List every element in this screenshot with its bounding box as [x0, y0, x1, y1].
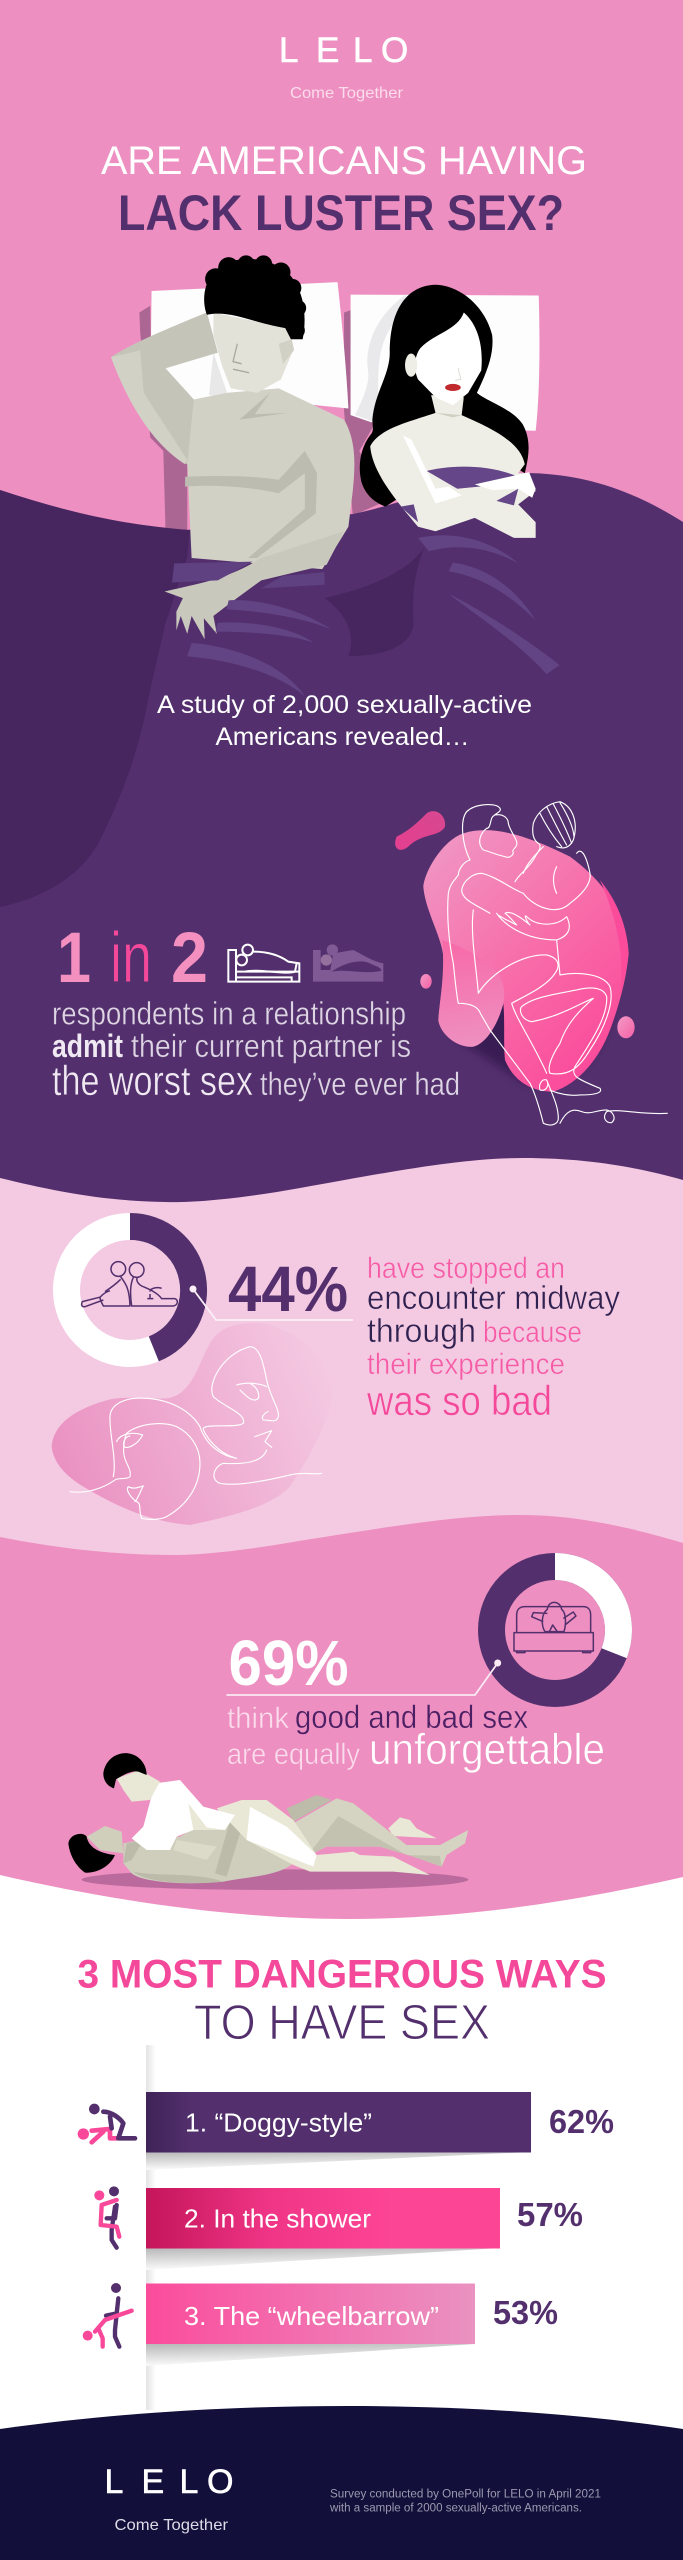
bar: wheelbarrow	[146, 2284, 558, 2366]
illustration: embracing couple	[68, 1753, 468, 1890]
panel: white section	[0, 1875, 683, 2560]
man's hair	[204, 255, 306, 339]
text block: stopped midway: encounter midway	[367, 1279, 620, 1316]
bar: doggy-style: 62%	[549, 2103, 614, 2140]
illustration: headboard and pillows	[139, 282, 539, 531]
icon: position two	[94, 2186, 119, 2248]
bar: in the shower: 2. In the shower	[184, 2204, 371, 2234]
bar: doggy-style	[146, 2092, 614, 2170]
man's body	[111, 312, 354, 569]
text block: stopped midway: have stopped an	[367, 1252, 565, 1285]
panel: purple blanket section	[0, 473, 683, 1202]
stat: 44%: 44%	[228, 1253, 348, 1325]
stat: 1 in 2	[57, 919, 208, 998]
illustration: couple in bed	[111, 255, 560, 696]
icon: bed outline	[228, 945, 299, 982]
icon: back to back couple	[82, 1262, 177, 1307]
logo: LELO header: LELO	[279, 31, 408, 70]
heading: dangerous ways: TO HAVE SEX	[194, 1996, 490, 2050]
decoration: dark blanket shadow	[0, 490, 190, 907]
lower figure	[123, 1803, 293, 1883]
text block: survey source: with a sample of 2000 sexually-active Americans.	[329, 2502, 582, 2514]
icon: position three	[83, 2283, 132, 2347]
upper torso	[132, 1780, 235, 1850]
text block: stopped midway: their experience	[367, 1348, 565, 1381]
stat: 69%: 69%	[228, 1627, 348, 1699]
upper figure legs	[217, 1800, 430, 1875]
text block: respondents statement	[52, 996, 460, 1104]
text block: stopped midway	[366, 1252, 620, 1424]
upper face and hair	[117, 1770, 160, 1802]
text block: study intro	[157, 691, 532, 751]
line art	[448, 802, 667, 1125]
icon: bed with figure	[514, 1602, 593, 1653]
bar: doggy-style: 1. “Doggy-style”	[185, 2108, 372, 2138]
text block: respondents statement: respondents in a relationship	[52, 996, 406, 1032]
text block: stopped midway: was so bad	[366, 1377, 552, 1424]
icon: bed filled	[313, 944, 383, 982]
chart: 44% donut	[66, 1226, 194, 1354]
text block: survey source: Survey conducted by OnePoll for LELO in April 2021	[330, 2488, 601, 2500]
bar: wheelbarrow: 3. The “wheelbarrow”	[184, 2301, 439, 2331]
text block: stopped midway: because	[483, 1316, 582, 1349]
title: LACK LUSTER SEX?	[118, 185, 564, 241]
text block: study intro: Americans revealed…	[216, 723, 470, 751]
logo: LELO footer: LELO	[104, 2463, 233, 2501]
blanket folds	[172, 562, 253, 583]
text block: respondents statement: admit	[52, 1028, 123, 1064]
illustration: line-art faces	[52, 1323, 333, 1525]
text block: unforgettable: are equally	[227, 1738, 360, 1771]
bar: in the shower	[146, 2188, 583, 2270]
illustration: pink blob with line-art couple	[395, 802, 667, 1125]
panel: navy footer	[0, 2406, 683, 2560]
bar: in the shower: 57%	[517, 2196, 583, 2233]
text block: respondents statement: their current partner is	[131, 1028, 411, 1064]
bar: wheelbarrow: 53%	[493, 2294, 558, 2331]
bar chart: dangerous positions	[146, 2092, 614, 2366]
text block: unforgettable	[227, 1699, 605, 1774]
stat: 1 in 2: in	[110, 919, 152, 998]
text block: respondents statement: they’ve ever had	[260, 1066, 460, 1102]
text block: respondents statement: the worst sex	[52, 1057, 253, 1104]
stat: 1 in 2: 1	[57, 919, 91, 998]
title	[101, 139, 587, 241]
stat: 1 in 2: 2	[171, 919, 208, 998]
tagline: footer: Come Together	[114, 2517, 229, 2534]
woman's hair	[360, 285, 529, 507]
text block: stopped midway: through	[367, 1312, 476, 1349]
woman's body	[370, 395, 536, 538]
text block: unforgettable: unforgettable	[369, 1725, 605, 1774]
callout: 44% leader line	[190, 1286, 353, 1320]
text block: unforgettable: think	[227, 1702, 290, 1735]
man's face	[213, 312, 294, 393]
title: ARE AMERICANS HAVING	[101, 139, 587, 183]
woman's face	[415, 312, 482, 405]
man's hand and forearm	[165, 531, 344, 639]
callout: 69% leader line	[226, 1660, 501, 1695]
decoration: vertical fold shadow	[146, 2045, 156, 2410]
chart: 69% donut	[492, 1566, 618, 1694]
tagline: Come Together	[290, 85, 404, 102]
heading: dangerous ways	[78, 1952, 606, 2050]
text block: study intro: A study of 2,000 sexually-active	[157, 691, 532, 719]
icon: position one	[78, 2104, 135, 2142]
lower face	[87, 1826, 123, 1853]
heading: dangerous ways: 3 MOST DANGEROUS WAYS	[78, 1952, 606, 1996]
text block: survey source	[329, 2488, 601, 2514]
text block: unforgettable: good and bad sex	[295, 1699, 528, 1735]
panel: light pink section background	[0, 1100, 683, 1555]
